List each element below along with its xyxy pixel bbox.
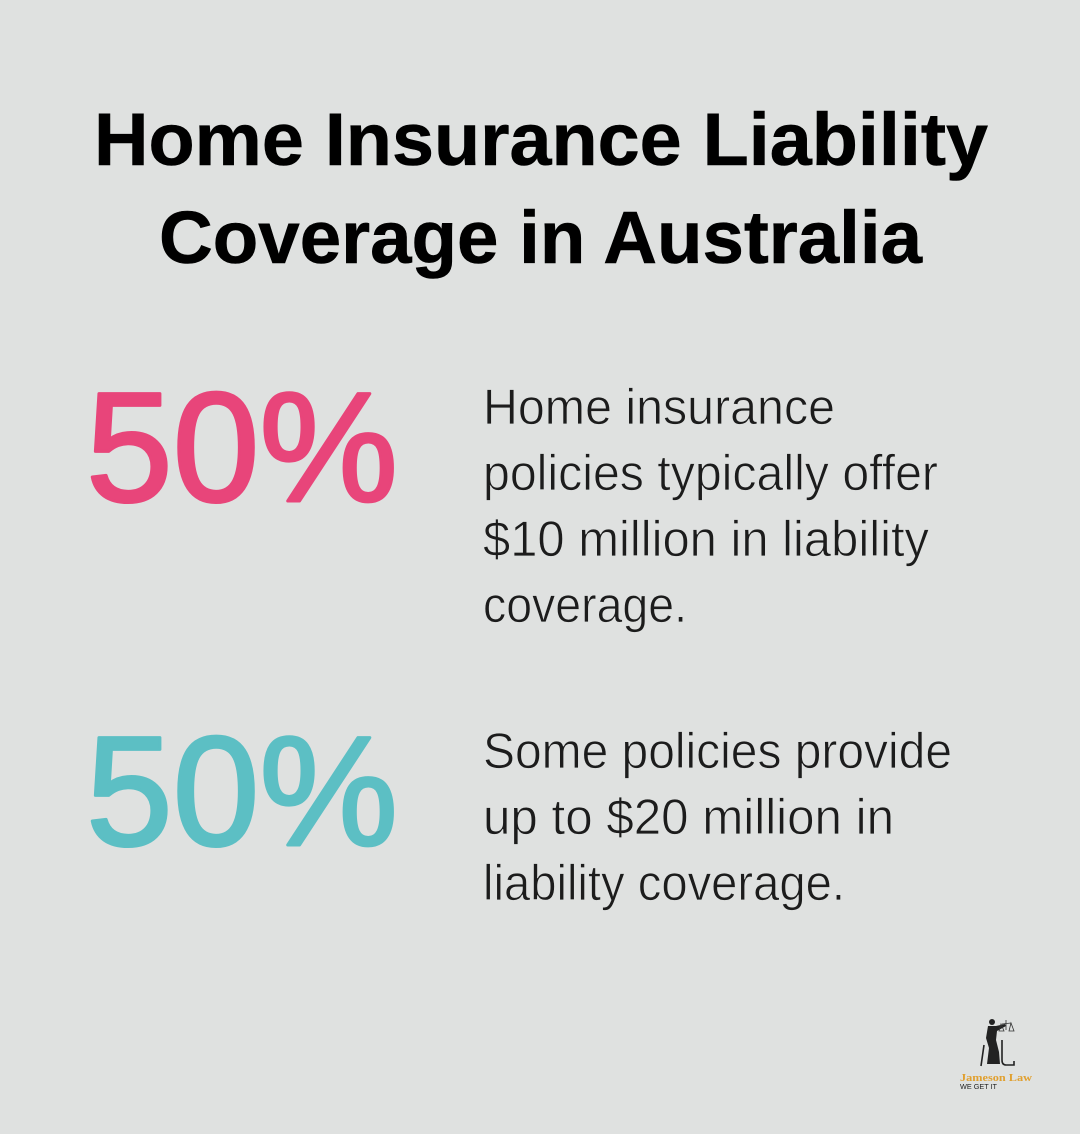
text block: $10 million coverage: policies typically offer: [483, 445, 938, 501]
text block: $10 million coverage: [483, 379, 938, 633]
text block: $20 million coverage: up to $20 million in: [483, 789, 894, 845]
text block: $10 million coverage: Home insurance: [483, 379, 835, 435]
title: Coverage in Australia: [159, 196, 923, 279]
text block: $20 million coverage: [483, 723, 952, 911]
statistic: 50% pink: 50%: [86, 361, 398, 535]
statistic: 50% teal: 50%: [86, 705, 398, 879]
text block: $10 million coverage: coverage.: [483, 577, 687, 633]
title: [94, 98, 988, 279]
text block: $20 million coverage: Some policies provide: [483, 723, 952, 779]
text block: $20 million coverage: liability coverage.: [483, 855, 845, 911]
logo wordmark: Jameson Law: [960, 1073, 1032, 1084]
text block: $10 million coverage: $10 million in liability: [483, 511, 929, 567]
logo: Jameson Law: [960, 1019, 1032, 1091]
logo tagline: WE GET IT: [960, 1082, 997, 1091]
icon: lady justice: [981, 1019, 1014, 1066]
title: Home Insurance Liability: [94, 98, 988, 181]
